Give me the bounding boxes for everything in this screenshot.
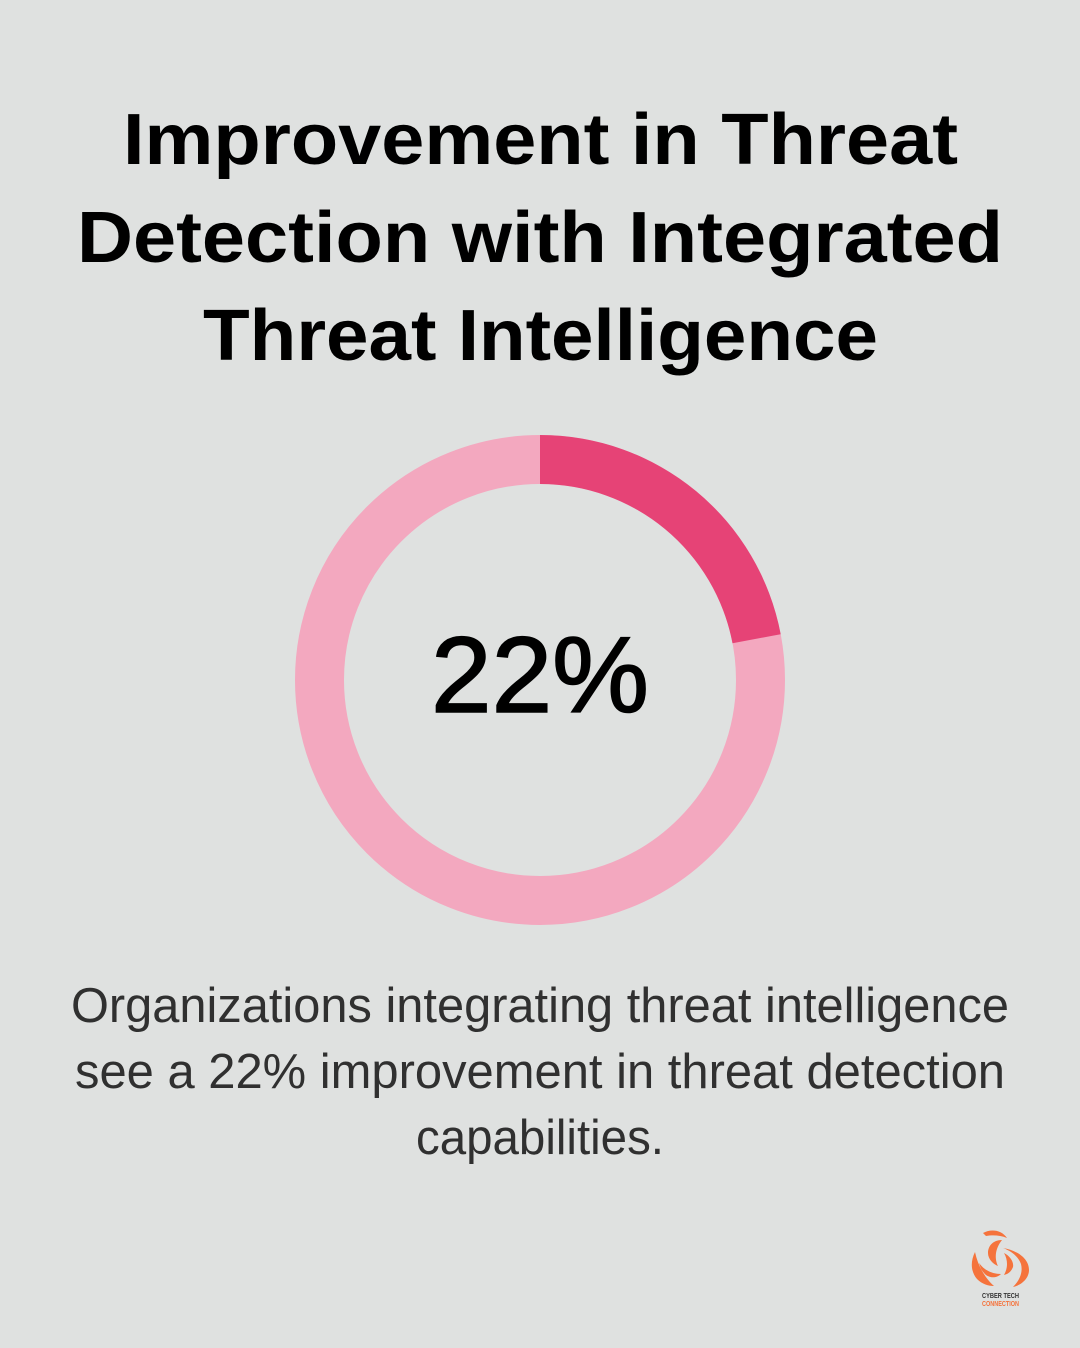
description text: see a 22% improvement in threat detection bbox=[75, 1045, 1005, 1099]
title bbox=[77, 100, 1003, 376]
description text: Organizations integrating threat intelligence bbox=[71, 979, 1009, 1033]
donut value segment bbox=[540, 435, 781, 643]
logo wordmark bottom: CONNECTION bbox=[982, 1301, 1019, 1308]
description text bbox=[71, 979, 1009, 1165]
donut value label: 22% bbox=[431, 614, 649, 735]
title: Improvement in Threat bbox=[123, 100, 958, 180]
title: Detection with Integrated bbox=[77, 198, 1003, 278]
logo: Cyber Tech Connection bbox=[972, 1230, 1029, 1308]
description text: capabilities. bbox=[416, 1111, 664, 1165]
donut track bbox=[320, 460, 760, 900]
title: Threat Intelligence bbox=[203, 296, 878, 376]
logo wordmark top: CYBER TECH bbox=[982, 1293, 1019, 1300]
logo icon: three swirling arcs bbox=[972, 1230, 1029, 1287]
donut chart: 22% bbox=[320, 435, 781, 900]
